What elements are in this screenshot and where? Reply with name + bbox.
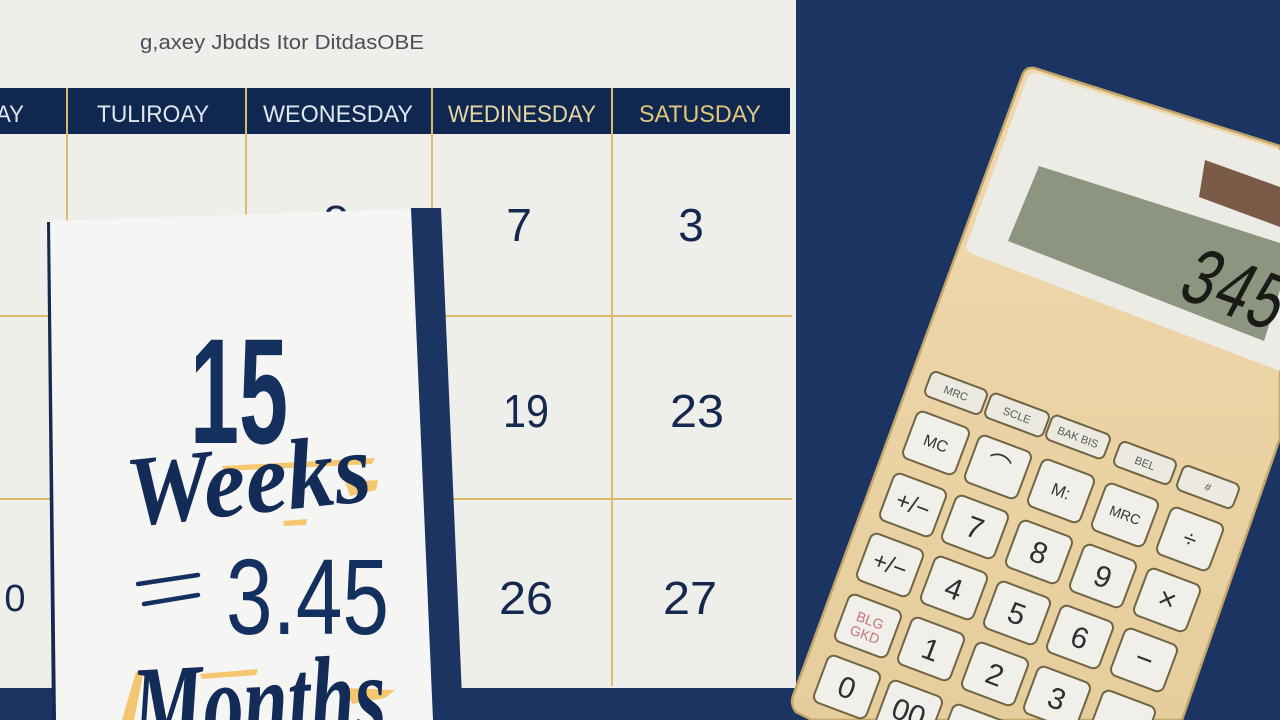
handwritten Weeks: Weeks [121, 412, 376, 548]
weekday header bar: SATUSDAY [639, 101, 761, 128]
calendar dates: 8 [323, 196, 349, 248]
calendar title: g,axey Jbdds Itor DitdasOBE [140, 32, 424, 54]
calendar dates: 27 [663, 572, 717, 624]
calendar dates: 19 [503, 385, 549, 437]
main keypad: ⌒ [982, 450, 1014, 483]
calendar dates: 26 [499, 572, 553, 624]
main keypad: ÷ [1179, 525, 1201, 554]
main keypad: 9 [1089, 559, 1116, 596]
solar panel [1199, 160, 1280, 227]
main keypad: 0 [833, 670, 860, 707]
calendar dates: 3 [678, 199, 704, 251]
main keypad: × [1153, 581, 1181, 618]
small function keys: BAK BIS [1056, 425, 1100, 451]
main keypad: 2 [981, 657, 1008, 694]
calculator body [792, 68, 1280, 720]
main keypad: 1 [917, 632, 944, 669]
main keypad: M: [1049, 479, 1073, 504]
panel: handwritten note card [47, 208, 463, 720]
calculator white top panel [966, 73, 1280, 371]
main keypad: +/− [892, 487, 934, 524]
main keypad [812, 410, 1225, 720]
calendar dates: 23 [670, 385, 724, 437]
calendar dates: 7 [506, 199, 532, 251]
main keypad: 7 [961, 510, 988, 547]
main keypad: GKD [848, 622, 882, 647]
gold highlight strokes [122, 458, 395, 720]
main keypad: − [1130, 641, 1158, 678]
handwritten 15: 15 [190, 307, 288, 475]
handwritten equals sign [138, 575, 198, 604]
main keypad: +/− [869, 547, 911, 584]
main keypad: 4 [940, 571, 967, 608]
main keypad: 6 [1066, 620, 1093, 657]
small function keys: BEL [1133, 455, 1156, 473]
small function keys: MRC [942, 384, 970, 404]
main keypad: BLG [854, 608, 886, 633]
weekday header bar: TULIROAY [97, 101, 209, 128]
main keypad: 5 [1003, 596, 1030, 633]
weekday header bar: WEDINESDAY [448, 101, 596, 128]
main keypad: 3 [1043, 681, 1070, 718]
calendar dates [0, 196, 724, 624]
weekday header bar: WEONESDAY [263, 101, 413, 128]
panel: wall calendar [0, 0, 796, 688]
card navy spine [411, 208, 463, 720]
panel: calculator [792, 68, 1280, 720]
LCD display [1008, 166, 1280, 341]
main keypad: MRC [1107, 502, 1143, 528]
handwritten 3.45: 3.45 [226, 536, 389, 657]
small function keys: # [1203, 481, 1213, 495]
weekday header bar [0, 88, 790, 134]
main keypad: MC [921, 432, 950, 457]
calendar grid lines [0, 88, 792, 686]
small function keys [923, 370, 1241, 510]
small function keys: SCLE [1001, 405, 1032, 427]
main keypad: 8 [1025, 535, 1052, 572]
calendar dates: 0 [4, 578, 26, 620]
